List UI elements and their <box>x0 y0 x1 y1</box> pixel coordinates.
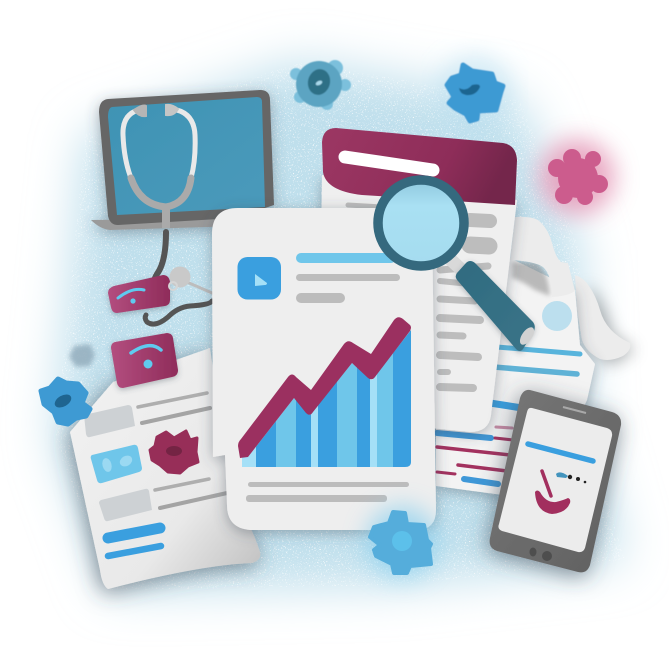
white tubes <box>123 109 143 178</box>
header title bar <box>345 157 433 170</box>
punched hole <box>542 301 572 331</box>
blob: faded germ <box>69 344 95 367</box>
tag: wifi lower <box>111 333 178 388</box>
handle <box>456 261 535 351</box>
speaker <box>563 407 586 413</box>
panel: lower left report <box>70 348 260 589</box>
home buttons <box>530 548 552 561</box>
icon: play tile <box>238 257 281 300</box>
earpieces <box>134 106 146 116</box>
magenta header <box>322 128 517 205</box>
blob: pink germ with glow <box>539 139 615 215</box>
trend line <box>238 317 411 458</box>
laptop <box>91 90 274 230</box>
panel: report with cyan and magenta lines <box>436 217 595 500</box>
magenta smile <box>535 490 570 514</box>
laptop screen <box>108 97 265 215</box>
illustration <box>32 40 641 615</box>
stroke mark <box>542 471 551 496</box>
thumbnail gray <box>84 405 135 437</box>
ribbon shadow <box>585 285 635 365</box>
magnifying glass <box>378 180 537 351</box>
blob: magenta germ <box>150 431 198 473</box>
stethoscope <box>123 105 212 324</box>
laptop lid <box>99 90 274 225</box>
tag: wifi upper <box>108 275 170 313</box>
thumbnail blue <box>91 445 142 483</box>
neck <box>449 258 467 275</box>
footer line short <box>246 495 387 502</box>
panel: main report <box>212 208 436 530</box>
ribbon: curled paper right <box>575 275 635 365</box>
blob: blue germ bottom with glow <box>366 506 438 578</box>
lower ribbon <box>575 275 630 360</box>
main paper <box>212 208 436 530</box>
screen bar <box>528 444 593 461</box>
chest piece <box>169 266 190 290</box>
text line short <box>296 293 345 303</box>
thumbnail gray lower <box>99 489 152 521</box>
curl shadow <box>512 262 550 296</box>
blob: blue germ left <box>41 379 90 424</box>
end cap <box>517 325 537 347</box>
blob: blue germ top right <box>437 54 513 130</box>
dots <box>556 472 586 483</box>
panel: report with magenta header <box>320 128 517 432</box>
text line <box>296 274 400 281</box>
heading bar <box>296 253 396 263</box>
gray yoke <box>131 178 191 207</box>
phone screen <box>498 408 612 552</box>
blob: teal germ top <box>290 60 351 110</box>
lens <box>378 180 464 266</box>
phone <box>490 390 621 572</box>
footer line <box>248 482 409 487</box>
upper curl <box>510 217 575 297</box>
area bar chart <box>242 320 411 470</box>
laptop base <box>91 218 240 230</box>
